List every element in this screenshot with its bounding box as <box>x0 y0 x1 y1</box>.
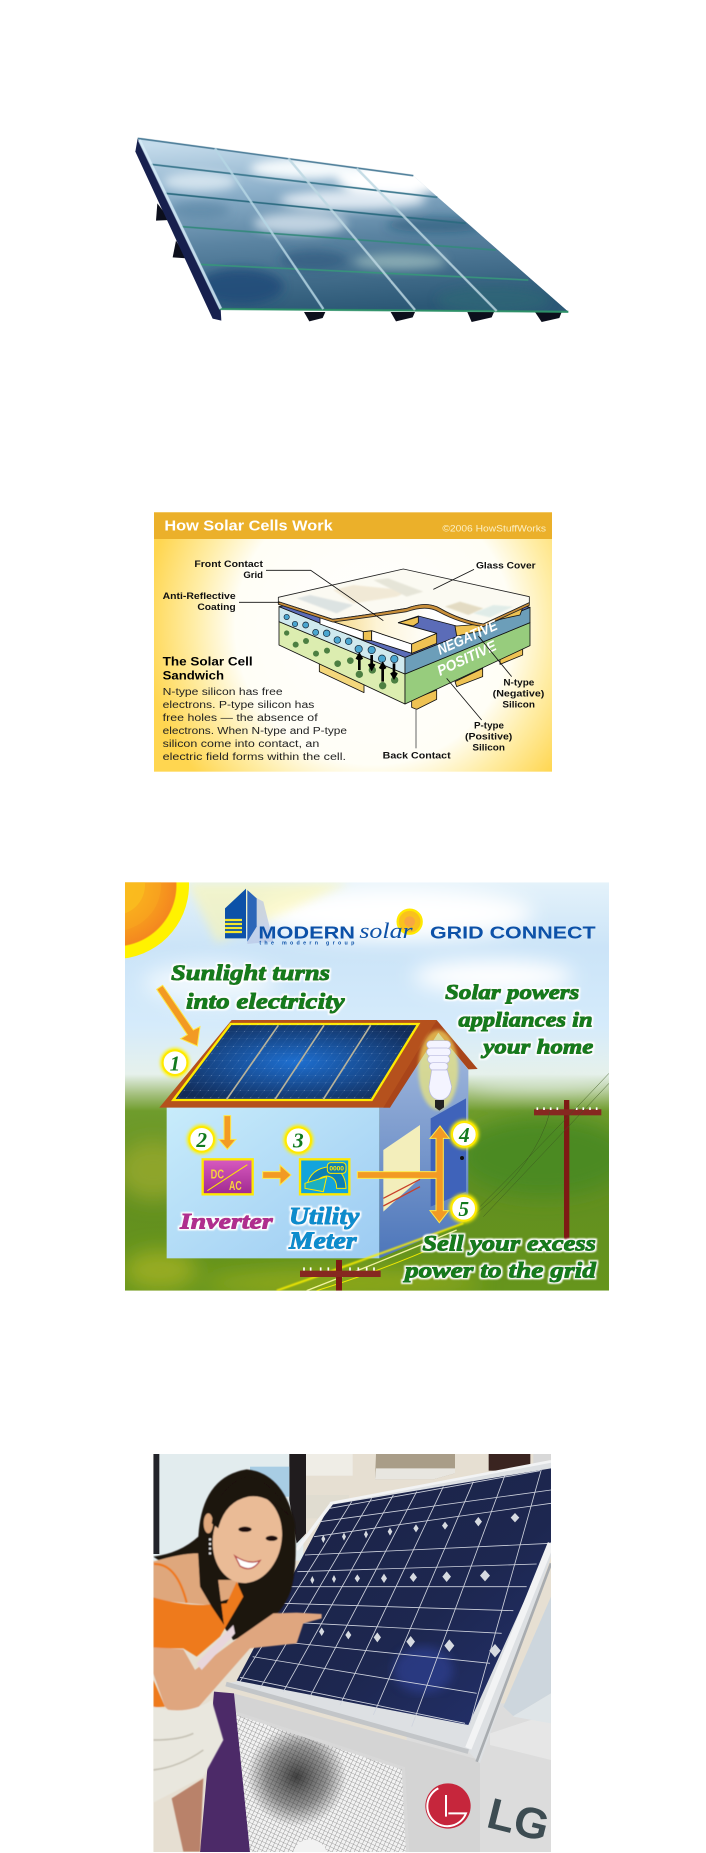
step numbers: 1 <box>170 1051 180 1075</box>
inverter box <box>203 1159 253 1194</box>
step numbers: 3 <box>292 1129 304 1153</box>
panel background <box>154 512 552 772</box>
solar cell diagram <box>279 580 530 709</box>
smile <box>235 1556 260 1569</box>
caption: sell to the grid <box>403 1231 597 1282</box>
caption: sunlight <box>171 960 345 1013</box>
leg <box>172 1778 203 1852</box>
neck and shoulder <box>153 1553 238 1605</box>
fringe <box>212 1477 288 1528</box>
lightning wires <box>277 1223 463 1291</box>
arrow: inverter to meter <box>263 1165 291 1185</box>
support legs <box>156 203 562 322</box>
module rows <box>138 138 568 312</box>
field arrows <box>357 655 397 682</box>
callout labels: P-type <box>474 720 504 730</box>
LG logo <box>425 1783 547 1839</box>
cell highlight <box>393 1647 453 1693</box>
electrons and holes <box>284 614 398 663</box>
label: utility meter <box>288 1204 360 1254</box>
sky and grass background <box>125 882 609 1291</box>
label: inverter: Inverter <box>179 1208 273 1233</box>
roof <box>159 1020 478 1108</box>
caption: sell to the grid: Sell your excess <box>422 1231 596 1256</box>
window <box>383 1125 420 1212</box>
glass cover <box>278 569 529 627</box>
panel: how solar cells work <box>154 512 552 772</box>
sandwich description: electrons. P-type silicon has <box>163 700 314 711</box>
hair strand <box>197 1540 224 1625</box>
AC unit body <box>233 1693 551 1852</box>
callout labels: Anti-Reflective <box>163 591 236 601</box>
purple column <box>200 1692 250 1852</box>
clouds and field <box>117 887 630 1297</box>
arrow: meter to home and grid <box>357 1126 449 1223</box>
front grid top <box>320 607 483 644</box>
step numbers: 4 <box>458 1123 470 1147</box>
inverter box: DC <box>211 1167 224 1181</box>
utility meter box: 0000 <box>329 1166 344 1173</box>
callout labels: (Positive) <box>465 731 512 741</box>
face <box>206 1488 289 1589</box>
orange top <box>153 1582 243 1707</box>
skirt <box>153 1700 223 1803</box>
top surface <box>279 580 530 657</box>
fan grill <box>236 1713 408 1852</box>
caption: sunlight: into electricity <box>186 988 345 1013</box>
label: utility meter: Meter <box>288 1228 357 1254</box>
panel frame <box>225 1461 551 1763</box>
ear <box>204 1513 213 1533</box>
sash <box>197 1625 235 1670</box>
power pole far <box>477 1073 609 1240</box>
back contacts <box>319 663 364 693</box>
callout labels: Grid <box>243 570 263 580</box>
sandwich heading: The Solar Cell <box>163 655 253 669</box>
title: How Solar Cells Work <box>164 518 333 535</box>
front grid faces <box>320 617 363 640</box>
eyes <box>238 1527 278 1541</box>
step numbers <box>170 1051 470 1221</box>
callout labels <box>163 559 544 761</box>
label: utility meter: Utility <box>289 1204 360 1230</box>
sandwich heading <box>163 655 253 682</box>
caption: sell to the grid: power to the grid <box>403 1257 597 1282</box>
callout labels: N-type <box>503 678 534 688</box>
logo: MODERN <box>258 922 355 942</box>
panel cells <box>237 1468 551 1725</box>
caption: sunlight: Sunlight turns <box>171 960 330 985</box>
caption: appliances <box>445 980 593 1058</box>
step badges <box>163 1050 477 1221</box>
step badge halos <box>160 1048 479 1223</box>
logo: solar <box>359 918 413 943</box>
sandwich description: N-type silicon has free <box>163 687 283 698</box>
hair back <box>153 1469 296 1640</box>
rooftop solar array <box>173 1024 418 1100</box>
leader lines <box>239 569 512 748</box>
glass reflections <box>297 578 513 617</box>
panel: how solar cells work: POSITIVE <box>435 638 500 680</box>
layer labels: NEGATIVE <box>435 618 501 659</box>
door <box>431 1098 466 1207</box>
rear bracket <box>503 1597 551 1716</box>
cell corner diamonds <box>310 1513 519 1657</box>
caption: appliances: appliances in <box>458 1008 593 1032</box>
infographic canvas <box>125 138 609 1852</box>
sandwich description: free holes — the absence of <box>163 713 318 724</box>
panel: grid connect diagram <box>125 882 609 1291</box>
sandwich description: electrons. When N-type and P-type <box>163 726 348 737</box>
light bulb <box>418 1030 458 1111</box>
copyright: ©2006 HowStuffWorks <box>442 524 547 534</box>
panel: LG solar product photo <box>153 1454 554 1852</box>
sandwich heading: Sandwich <box>163 668 224 682</box>
callout labels: Front Contact <box>194 559 263 569</box>
callout labels: Back Contact <box>383 751 451 761</box>
callout labels: Silicon <box>472 742 505 752</box>
strap <box>154 1564 187 1603</box>
reflective glass surface <box>138 138 568 313</box>
house side wall <box>379 1030 468 1258</box>
bus bars <box>240 1468 551 1727</box>
logo: the modern group <box>259 940 355 946</box>
sandwich description <box>163 687 348 763</box>
logo: GRID CONNECT <box>430 922 596 942</box>
sandwich description: electric field forms within the cell. <box>163 752 346 763</box>
arrow: sunlight <box>157 985 200 1046</box>
logo <box>225 889 596 946</box>
positive layer <box>279 622 405 704</box>
power pole near <box>300 1260 381 1291</box>
header bar <box>154 512 552 539</box>
woman <box>153 1469 322 1852</box>
inverter box: AC <box>229 1179 242 1193</box>
arm <box>153 1613 322 1718</box>
utility meter box <box>300 1159 349 1194</box>
callout labels: Glass Cover <box>476 560 536 570</box>
house front wall <box>167 1105 379 1258</box>
earring <box>207 1538 213 1555</box>
sandwich description: silicon come into contact, an <box>163 739 319 750</box>
callout labels: Coating <box>197 602 236 612</box>
arrow: panel to inverter <box>219 1116 236 1149</box>
caption: appliances: your home <box>480 1034 593 1058</box>
step numbers: 5 <box>458 1197 469 1221</box>
caption: appliances: Solar powers <box>445 980 579 1004</box>
dark side frame <box>135 138 221 321</box>
callout labels: Silicon <box>502 700 535 710</box>
callout labels: (Negative) <box>493 689 544 699</box>
module columns <box>139 140 497 311</box>
showroom background <box>153 1454 551 1852</box>
LG logo: LG <box>483 1790 554 1851</box>
step numbers: 2 <box>195 1128 207 1152</box>
panel: solar array photo <box>135 138 568 322</box>
sun <box>125 882 346 958</box>
negative layer <box>279 607 405 674</box>
aluminium frame edges <box>226 1461 551 1762</box>
